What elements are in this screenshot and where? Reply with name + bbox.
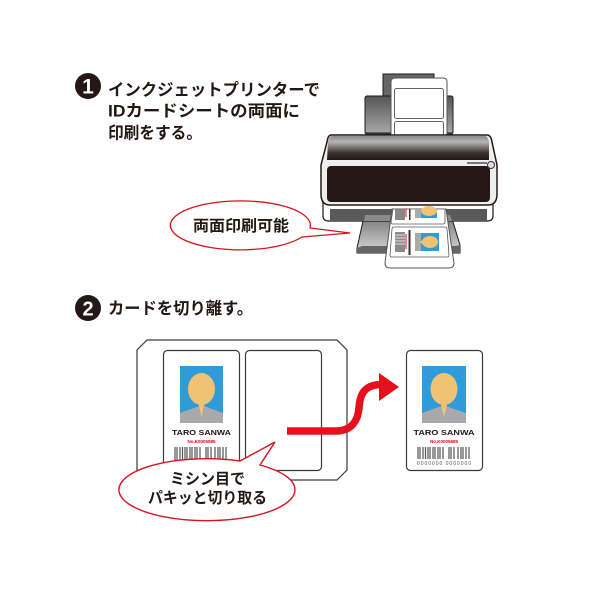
step 2 heading: カードを切り離す。	[108, 299, 253, 318]
speech bubble: double-sided printing: 両面印刷可能	[193, 216, 290, 235]
step 2 number badge	[75, 295, 101, 321]
finished ID card: TARO SANWA	[414, 428, 475, 437]
printer illustration	[321, 74, 497, 268]
speech bubble: double-sided printing	[170, 201, 350, 250]
left card on sheet	[164, 350, 240, 476]
card sheet	[137, 340, 347, 480]
barcode	[175, 447, 226, 461]
barcode	[418, 447, 469, 459]
step 1 heading: IDカードシートの両面に	[108, 102, 300, 120]
printer output tray	[357, 212, 460, 253]
printer input sheet	[391, 78, 447, 144]
step 1 heading	[108, 80, 320, 142]
upper printed card	[391, 206, 445, 224]
photo	[180, 366, 223, 423]
step 1 number badge	[75, 73, 101, 99]
printer rear paper support	[365, 74, 453, 141]
speech bubble: tear along perforation	[119, 442, 295, 521]
step 2 number badge: 2	[82, 298, 94, 320]
step 1 heading: インクジェットプリンターで	[108, 80, 320, 100]
right card on sheet	[246, 350, 322, 470]
left card on sheet: TARO SANWA	[172, 428, 232, 437]
red arrow	[287, 373, 399, 431]
step 1 number badge: 1	[82, 76, 94, 98]
step 1 heading: 印刷をする。	[108, 122, 202, 142]
photo	[422, 366, 466, 423]
printed sheet with ID cards	[385, 206, 454, 268]
speech bubble: tear along perforation: パキッと切り取る	[148, 489, 267, 507]
speech bubble: tear along perforation: ミシン目で	[170, 471, 245, 488]
printer lower body	[323, 203, 493, 221]
printer main body	[321, 135, 497, 205]
finished ID card: No.K0005985	[430, 439, 458, 444]
lower printed card	[390, 227, 449, 257]
finished ID card: 0000000 0000000	[417, 461, 471, 467]
left card on sheet: No.K0005985	[187, 439, 216, 444]
finished ID card	[406, 350, 482, 470]
